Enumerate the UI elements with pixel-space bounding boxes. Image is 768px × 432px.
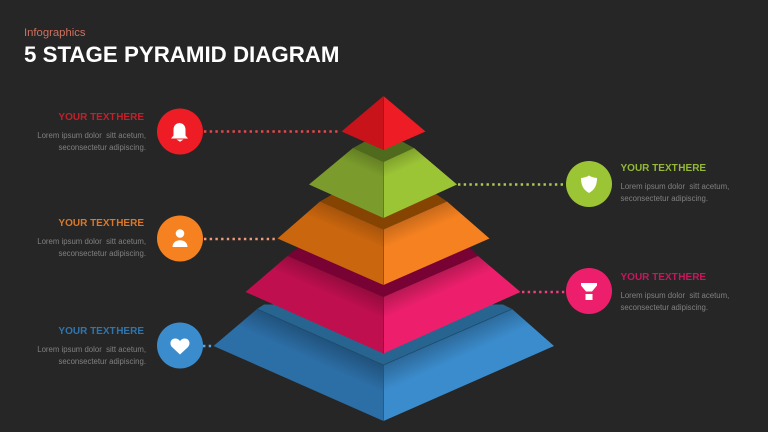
connector: orange [204, 238, 277, 240]
eyebrow label: Infographics [24, 26, 86, 38]
text block: red stage: YOUR TEXT HERE [58, 112, 144, 123]
text block: pink stage: Lorem ipsum dolor sitt acetum, seconsectetur adipiscing. [620, 291, 729, 312]
icon: trophy [566, 268, 612, 314]
icon: shield [566, 161, 612, 207]
stage 2 green layer [309, 142, 457, 218]
connector: red [204, 130, 338, 133]
text block: green stage [620, 163, 729, 203]
text block: red stage [37, 112, 146, 152]
stage 5 blue layer [214, 304, 554, 421]
icon: bell [157, 108, 203, 154]
text block: blue stage: YOUR TEXT HERE [58, 326, 144, 337]
title: 5 STAGE PYRAMID DIAGRAM [24, 42, 339, 67]
stage 1 red apex [342, 96, 426, 150]
icon: heart [157, 322, 203, 368]
text block: red stage: Lorem ipsum dolor sitt acetum, seconsectetur adipiscing. [37, 131, 146, 152]
text block: orange stage: Lorem ipsum dolor sitt acetum, seconsectetur adipiscing. [37, 237, 146, 258]
stage 4 pink layer [246, 248, 520, 354]
text block: blue stage: Lorem ipsum dolor sitt acetum, seconsectetur adipiscing. [37, 345, 146, 366]
text block: green stage: YOUR TEXT HERE [620, 163, 706, 174]
text block: pink stage [620, 272, 729, 312]
connector: blue [203, 345, 213, 347]
connector: pink [522, 291, 566, 293]
text block: blue stage [37, 326, 146, 366]
text block: orange stage: YOUR TEXT HERE [58, 218, 144, 229]
text block: orange stage [37, 218, 146, 258]
icon: person [157, 216, 203, 262]
connector: green [458, 183, 565, 186]
text block: green stage: Lorem ipsum dolor sitt acetum, seconsectetur adipiscing. [620, 182, 729, 203]
text block: pink stage: YOUR TEXT HERE [620, 272, 706, 283]
stage 3 orange layer [278, 190, 490, 285]
